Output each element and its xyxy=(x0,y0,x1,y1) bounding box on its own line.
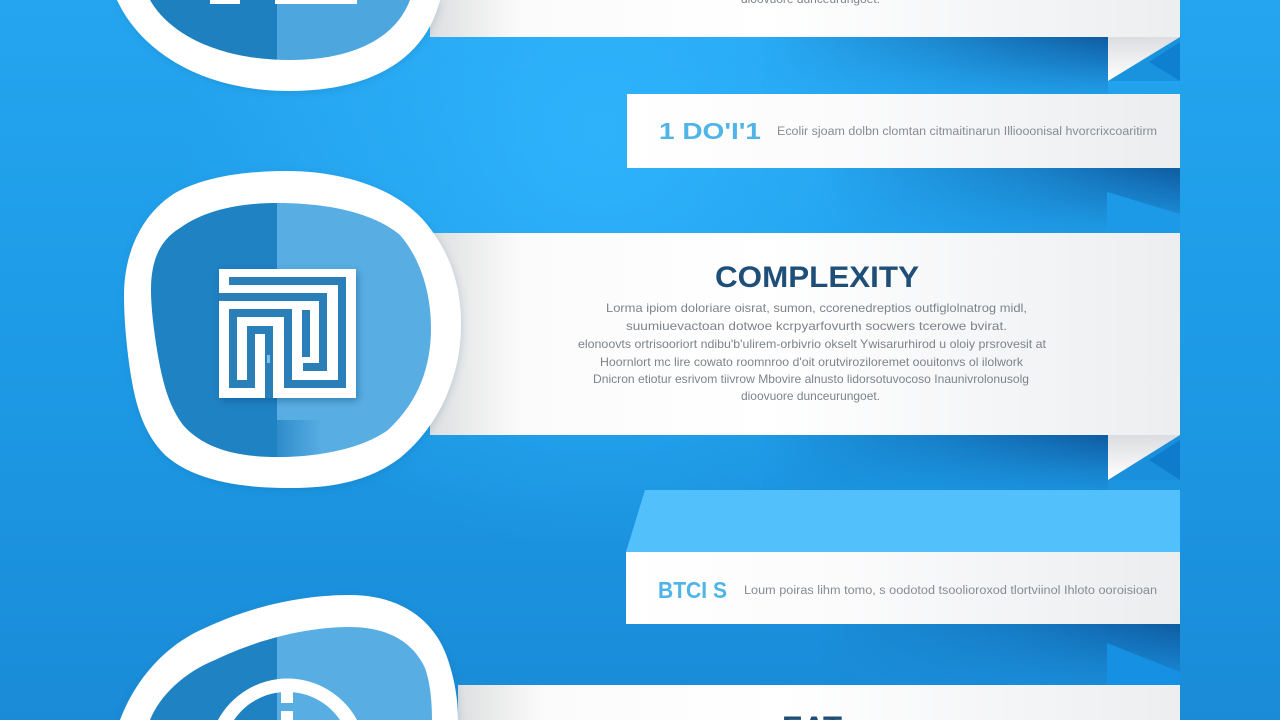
blob: two-tone fill xyxy=(151,203,431,457)
icon: maze xyxy=(219,269,356,398)
panel: top blob xyxy=(117,0,440,91)
body text: complexity: Lorma ipiom doloriare oisrat, sumon, ccorenedreptios outfiglolnatrog midl, xyxy=(606,301,1027,315)
panel: bottom banner xyxy=(458,685,1180,720)
fold: complexity banner corner xyxy=(1108,435,1180,480)
body text: flap banner: Loum poiras lihm tomo, s oodotod tsoolioroxod tlortviinol Ihloto ooroisioan xyxy=(744,585,1157,597)
heading: complexity: COMPLEXITY xyxy=(715,261,919,294)
body text: complexity: suumiuevactoan dotwoe kcrpyarfovurth socwers tcerowe bvirat. xyxy=(626,319,1007,333)
body text: complexity: Dnicron etiotur esrivom tiivrow Mbovire alnusto lidorsotuvocoso Inaunivrolonusolg xyxy=(593,372,1029,386)
panel: small banner one xyxy=(627,94,1180,168)
label: flap banner: BTCI S xyxy=(658,577,727,603)
flap xyxy=(626,490,1180,552)
panel: central blob with maze icon xyxy=(124,171,461,488)
strip xyxy=(626,552,1180,624)
fold: top banner corner xyxy=(1108,37,1180,81)
body text: complexity: dioovuore dunceurungoet. xyxy=(741,389,880,403)
panel: complexity banner xyxy=(430,233,1180,435)
panel: banner with raised flap xyxy=(626,490,1180,624)
label: small banner one: 1 DO'I'1 xyxy=(659,118,761,144)
body text: complexity xyxy=(578,301,1047,403)
body text: complexity: elonoovts ortrisooriort ndibu'b'ulirem-orbivrio okselt Ywisarurhirod u oloiy prsrovesit at xyxy=(578,337,1047,351)
body text: complexity: Hoornlort mc lire cowato roomnroo d'oit orutviroziloremet oouitonvs ol ilolwork xyxy=(600,355,1024,369)
body text: small banner one: Ecolir sjoam dolbn clomtan citmaitinarun Illiooonisal hvorcrixcoaritirm xyxy=(777,126,1157,138)
panel: top banner xyxy=(430,0,1180,37)
panel: bottom blob with target icon xyxy=(120,595,458,720)
blob: white ring xyxy=(124,171,461,488)
icon: target xyxy=(218,679,357,720)
panel shadows xyxy=(800,37,1180,685)
